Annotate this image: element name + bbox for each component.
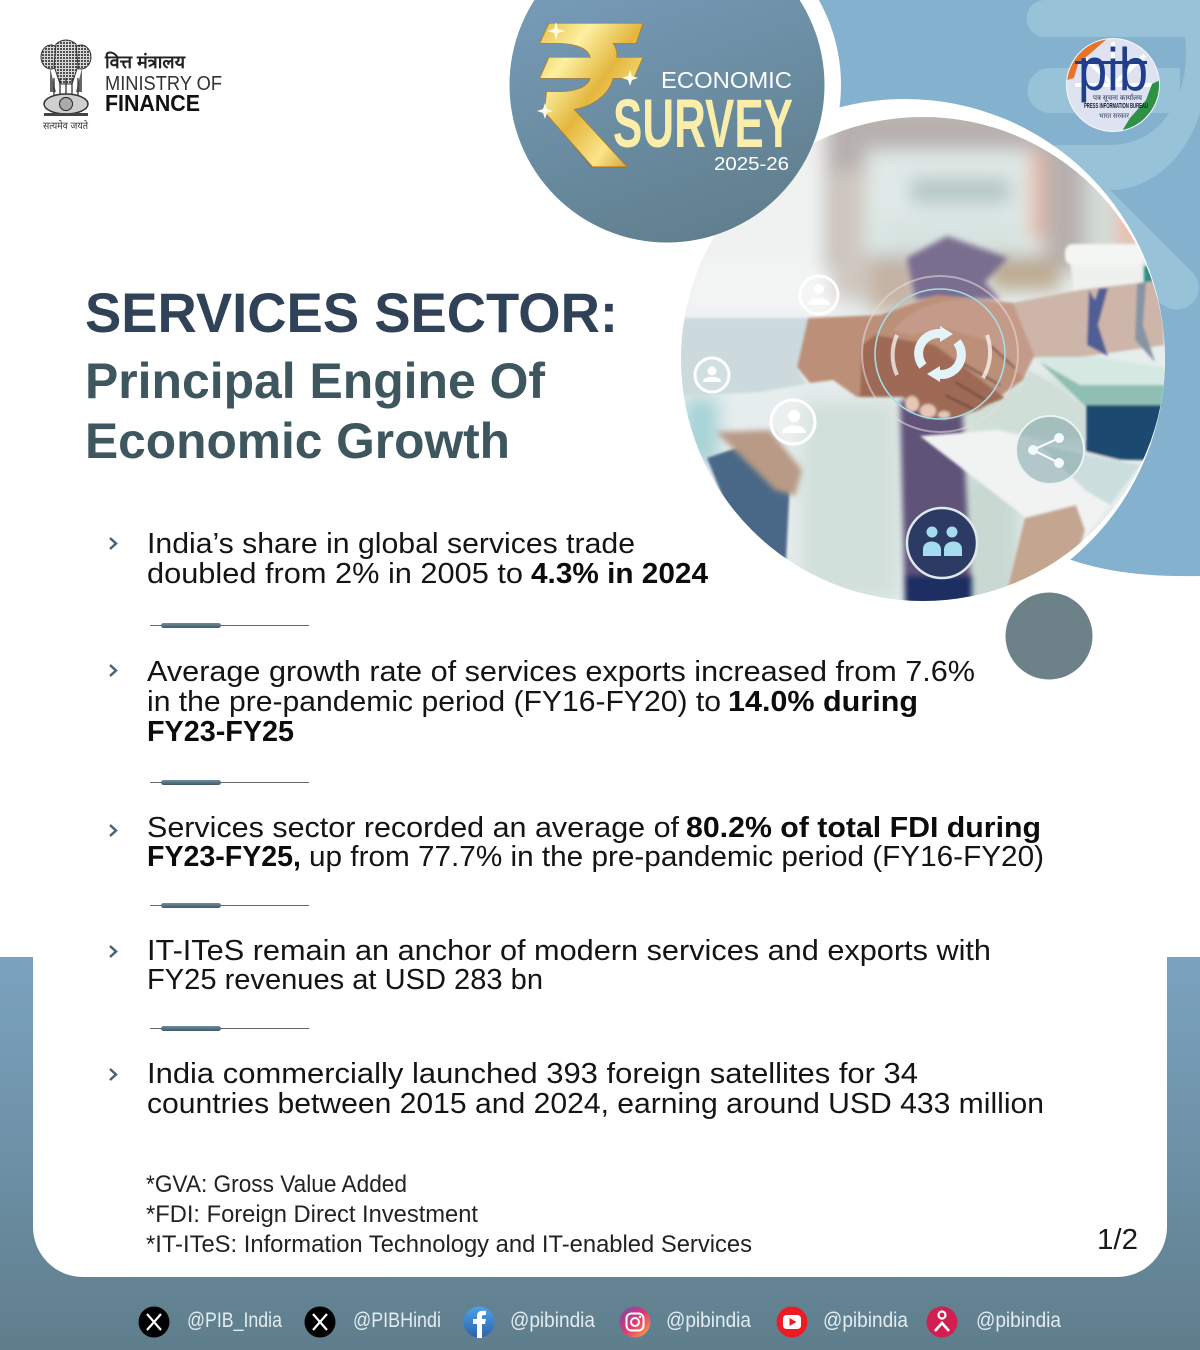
bullet 2: FY23-FY25	[147, 716, 294, 748]
icon: person top	[800, 276, 838, 314]
title	[85, 281, 618, 469]
divider 3	[150, 903, 309, 908]
arms and hand silhouette	[796, 294, 1028, 418]
footnotes: *IT-ITeS: Information Technology and IT-enabled Services	[146, 1231, 752, 1258]
bottom gradient band	[0, 957, 1200, 1350]
icon: youtube	[776, 1306, 808, 1338]
table mint slab	[1036, 356, 1164, 384]
handle x hindi: @PIBHindi	[353, 1309, 441, 1332]
bullet 2: 14.0% during	[728, 686, 918, 718]
table surface	[1026, 370, 1088, 442]
footnotes: *FDI: Foreign Direct Investment	[146, 1201, 478, 1228]
grey accent circle	[1006, 592, 1092, 680]
divider 4	[150, 1026, 309, 1031]
bullet 5	[110, 1058, 1044, 1120]
ministry name english: MINISTRY OF	[105, 73, 222, 95]
icon: koo style	[926, 1306, 958, 1338]
bullet 2: Average growth rate of services exports increased from 7.6%	[147, 656, 975, 688]
badge year: 2025-26	[714, 154, 789, 174]
icon: sparkles	[537, 22, 638, 119]
logo: press information bureau	[1066, 36, 1160, 132]
icon: instagram	[620, 1306, 650, 1338]
bullet 3: Services sector recorded an average of	[147, 812, 680, 844]
icon: network	[1016, 416, 1084, 484]
refresh icon	[919, 326, 961, 382]
divider 2	[150, 780, 309, 785]
social bar	[138, 1306, 1061, 1338]
jeans	[707, 443, 790, 560]
dark lower right panel	[1086, 405, 1168, 460]
divider 1	[150, 623, 309, 628]
bullet 3: 80.2% of total FDI during	[686, 812, 1041, 844]
photo: business handshake	[670, 105, 1170, 610]
badge title: survey: SURVEY	[613, 85, 793, 162]
logo green arc	[1122, 80, 1160, 131]
icon: people group	[907, 508, 977, 578]
bullet 3	[110, 812, 1044, 873]
white ring behind photo	[645, 99, 1165, 619]
emblem motto: सत्यमेव जयते	[43, 120, 88, 132]
lower hand	[1007, 504, 1086, 586]
white content card	[33, 900, 1167, 1277]
coffee cup	[1065, 244, 1145, 292]
bullet 2	[110, 656, 975, 748]
logo caption: PRESS INFORMATION BUREAU	[1084, 103, 1148, 110]
bullet 4: FY25 revenues at USD 283 bn	[147, 964, 543, 996]
logo: ministry of finance	[41, 40, 222, 132]
page number: 1/2	[1097, 1224, 1138, 1256]
bullet 2: in the pre-pandemic period (FY16-FY20) to	[147, 686, 721, 718]
logo bar	[1075, 61, 1147, 64]
bullet 4	[110, 935, 991, 996]
resting hand	[716, 430, 802, 496]
logo letters: pib	[1078, 36, 1148, 103]
palm shadow	[860, 335, 1005, 418]
icon: person left	[695, 358, 729, 392]
sleeve	[678, 318, 808, 396]
ministry name bold: FINANCE	[105, 90, 200, 116]
icon: x hindi	[304, 1306, 336, 1338]
icon: person lower	[771, 400, 815, 444]
teal sliver	[1142, 264, 1152, 284]
heading line 1: SERVICES SECTOR:	[85, 281, 618, 344]
blue top-right backdrop	[790, 0, 1200, 576]
bullet 3: up from 77.7% in the pre-pandemic period (FY16-FY20)	[309, 841, 1044, 873]
handle x india: @PIB_India	[187, 1309, 282, 1332]
scene objects	[678, 244, 1170, 600]
economic survey badge	[510, 0, 824, 242]
icon: facebook	[464, 1306, 494, 1338]
bracelet	[1087, 288, 1108, 356]
icon: x	[138, 1306, 170, 1338]
badge title: economic: ECONOMIC	[661, 67, 792, 93]
heading line 2: Principal Engine Of	[85, 353, 545, 409]
knuckle lines	[945, 345, 1015, 410]
heading line 3: Economic Growth	[85, 413, 510, 469]
bullet 4: IT-ITeS remain an anchor of modern services and exports with	[147, 935, 991, 967]
logo saffron arc	[1067, 38, 1108, 80]
ministry name hindi: वित्त मंत्रालय	[104, 51, 187, 72]
icon: state emblem	[41, 40, 91, 116]
tablet	[920, 430, 1140, 535]
bullet 1	[110, 528, 708, 590]
center ring network	[862, 276, 1018, 432]
bullet 5: countries between 2015 and 2024, earning around USD 433 million	[147, 1088, 1044, 1120]
logo hindi caption: भारत सरकार	[1099, 113, 1129, 120]
white ring behind survey badge	[493, 0, 841, 259]
fingertips	[905, 396, 950, 419]
footnotes	[146, 1171, 752, 1258]
handle koo: @pibindia	[976, 1309, 1061, 1332]
footnotes: *GVA: Gross Value Added	[146, 1171, 407, 1198]
handle instagram: @pibindia	[666, 1309, 751, 1332]
bangle	[1135, 282, 1155, 362]
bullet 3: FY23-FY25,	[147, 841, 301, 873]
rupee watermark	[1000, 0, 1200, 309]
icon: gold rupee	[540, 23, 643, 167]
icon: rupee shadow	[545, 110, 627, 168]
bullet 1: 4.3% in 2024	[531, 558, 708, 590]
handle facebook: @pibindia	[510, 1309, 595, 1332]
logo hindi line: पत्र सूचना कार्यालय	[1093, 93, 1143, 102]
bullet 1: doubled from 2% in 2005 to	[147, 558, 523, 590]
upper hand	[893, 300, 1035, 378]
handle youtube: @pibindia	[823, 1309, 908, 1332]
logo chakra spokes	[1075, 42, 1152, 85]
bullet 5: India commercially launched 393 foreign satellites for 34	[147, 1058, 918, 1090]
right forearm	[1013, 280, 1164, 357]
shirt star and tie	[900, 236, 1008, 610]
bullet 1: India’s share in global services trade	[147, 528, 635, 560]
